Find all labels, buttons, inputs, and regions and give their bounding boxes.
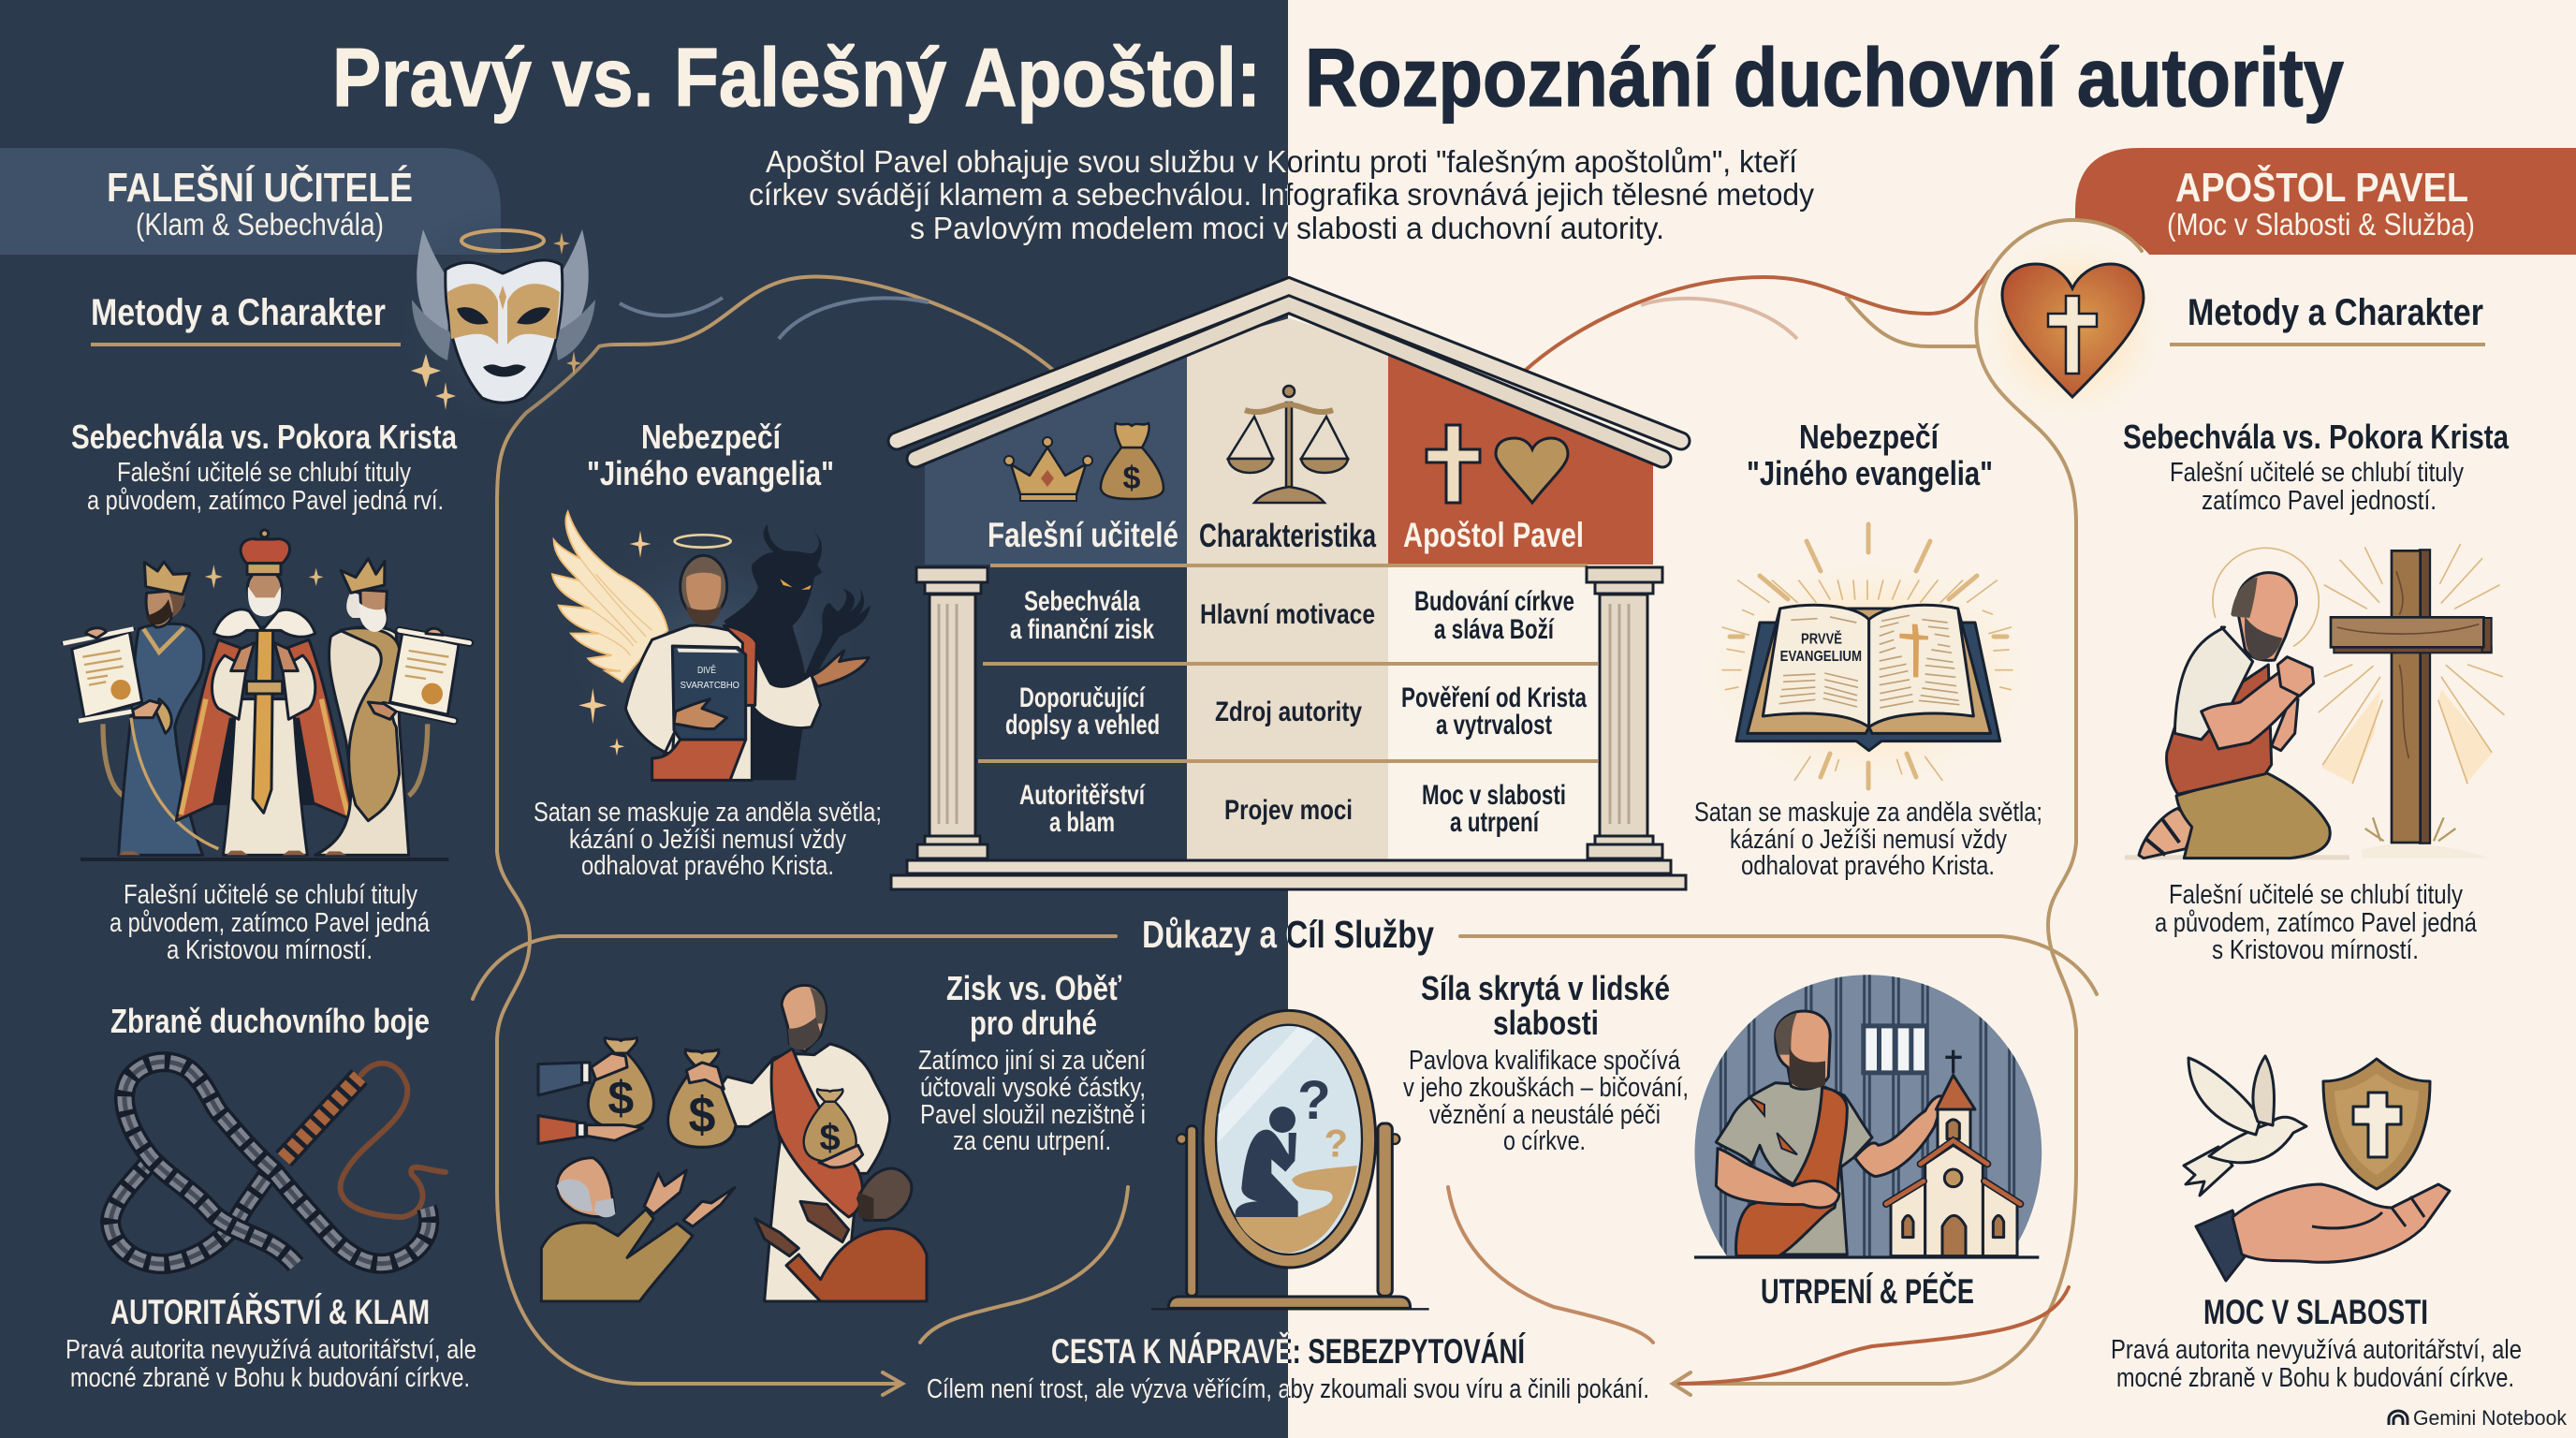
- table row: display of power: Moc v slabosti: [1422, 780, 1566, 811]
- caption: Paul humility: s Kristovou mírností.: [2212, 935, 2419, 965]
- text block: Síla skrytá v lidské slabosti: o církve.: [1503, 1126, 1586, 1156]
- temple: gable column false teachers: [925, 348, 1187, 565]
- icon: heart with cross: [1973, 228, 2172, 427]
- table row: source of authority: Doporučující: [1019, 682, 1146, 713]
- icon: golden heart: [1496, 438, 1568, 503]
- illustration: suffering Paul with church in prison: [1694, 964, 2042, 1257]
- table row: display of power: a blam: [1049, 807, 1115, 838]
- brand: Gemini Notebook: Gemini Notebook: [2413, 1406, 2568, 1430]
- caption: false teachers boast: a Kristovou mírností.: [167, 935, 373, 965]
- caption: Paul humility: a původem, zatímco Pavel jedná: [2155, 908, 2478, 938]
- text block: Satan masks right: kázání o Ježíši nemusí vždy: [1730, 825, 2007, 855]
- whip: [284, 1064, 446, 1217]
- illustration: angel of light masking a demon: SVARATCBHO: [681, 681, 739, 691]
- bag 1: [588, 1037, 653, 1128]
- text block: Sebechvála right: zatímco Pavel jedností.: [2202, 486, 2437, 516]
- table row: display of power: Autoritěřství: [1019, 780, 1146, 811]
- illustration: mirror of self-examination: ?: [1297, 1070, 1331, 1131]
- table header labels: Apoštol Pavel: [1403, 516, 1584, 554]
- temple: right column pillar: [1587, 567, 1662, 858]
- bag 2: [668, 1049, 736, 1147]
- table row: source of authority: [1005, 682, 1587, 741]
- chain links: [110, 1062, 429, 1265]
- panel header: false teachers: (Klam & Sebechvála): [136, 207, 384, 242]
- text block: Sebechvála left: [71, 418, 458, 516]
- icon: money bag: $: [1123, 461, 1141, 496]
- text block: Satan masks left: [534, 798, 882, 881]
- background: dark left half: [0, 0, 1288, 1438]
- caption: Paul humility: [2155, 880, 2478, 965]
- title: Rozpoznání duchovní autority: [1305, 31, 2344, 124]
- table row: source of authority: a vytrvalost: [1436, 710, 1552, 741]
- connector: left flowing lines: [473, 277, 1128, 1395]
- connector: right flowing lines: [1448, 220, 2175, 1395]
- caption: false teachers boast: Falešní učitelé se chlubí tituly: [124, 880, 417, 910]
- text block: Sebechvála right: [2123, 418, 2510, 516]
- text block: Zisk vs. Oběť: účtovali vysoké částky,: [920, 1073, 1146, 1103]
- heading: Zbraně duchovního boje: Zbraně duchovního boje: [110, 1002, 430, 1040]
- caption: Paul humility: Falešní učitelé se chlubí tituly: [2169, 880, 2463, 910]
- table row: main motivation: a finanční zisk: [1010, 614, 1154, 645]
- bag 3: $: [820, 1118, 841, 1159]
- text block: Moc v slabosti: MOC V SLABOSTI: [2203, 1293, 2428, 1331]
- intro text: Apoštol Pavel obhajuje svou službu v Korintu proti "falešným apoštolům", kteří: [766, 144, 1797, 179]
- illustration: chains and whip: [110, 1062, 446, 1265]
- table header labels: [988, 516, 1584, 554]
- bag 2: $: [689, 1087, 715, 1143]
- icon: open hand: [2196, 1184, 2450, 1281]
- table row: source of authority: Pověření od Krista: [1401, 682, 1587, 713]
- temple: table left column: [936, 565, 1187, 859]
- illustration: mirror of self-examination: [1151, 1010, 1429, 1309]
- icon: venetian mask with wings and halo: [386, 206, 620, 440]
- heading: Metody a Charakter right: Metody a Charakter: [2188, 292, 2483, 333]
- text block: Zisk vs. Oběť: Zatímco jiní si za učení: [918, 1046, 1146, 1076]
- text block: Nebezpečí left: Nebezpečí: [641, 418, 782, 456]
- table row: display of power: Projev moci: [1224, 795, 1353, 826]
- text block: Zisk vs. Oběť: Zisk vs. Oběť: [946, 969, 1122, 1007]
- panel header: apostle Paul: APOŠTOL PAVEL: [2175, 163, 2468, 211]
- temple: roof: [897, 286, 1681, 459]
- text block: Moc v slabosti: [2111, 1293, 2522, 1393]
- background: cream right half: [1288, 0, 2576, 1438]
- temple: table middle column: [1187, 565, 1388, 859]
- bag 1: $: [607, 1072, 634, 1124]
- text block: Zisk vs. Oběť: Pavel sloužil nezištně i: [920, 1100, 1146, 1130]
- text block: Autoritářství a klam: mocné zbraně v Bohu k budování církve.: [70, 1363, 470, 1393]
- icon: crown: [1004, 437, 1092, 501]
- illustration: radiant open bible: PRVVĚ: [1801, 629, 1842, 647]
- table row: display of power: a utrpení: [1450, 807, 1540, 838]
- label: UTRPENÍ & PÉČE: UTRPENÍ & PÉČE: [1761, 1271, 1974, 1311]
- table row: main motivation: a sláva Boží: [1434, 614, 1555, 645]
- text block: Sebechvála right: Falešní učitelé se chlubí tituly: [2170, 458, 2464, 488]
- text block: Nebezpečí left: [587, 418, 834, 492]
- icon: shield with cross: [2323, 1059, 2430, 1189]
- text block: Sebechvála left: Sebechvála vs. Pokora Krista: [71, 418, 458, 456]
- temple: row rules: [978, 565, 1598, 761]
- illustration: radiant open bible: EVANGELIUM: [1780, 649, 1862, 665]
- table row: source of authority: doplsy a vehled: [1005, 710, 1160, 741]
- temple: gable column characteristics: [1187, 318, 1388, 565]
- temple: table right column: [1388, 565, 1613, 859]
- illustration: angel of light masking a demon: [546, 508, 877, 784]
- illustration: dove, shield and open hand: [2184, 1056, 2450, 1281]
- panel header: false teachers: FALEŠNÍ UČITELÉ: [107, 163, 413, 211]
- text block: Síla skrytá v lidské slabosti: [1403, 969, 1689, 1156]
- table header labels: Charakteristika: [1199, 518, 1376, 554]
- temple: gable column apostle: [1388, 348, 1653, 565]
- table row: main motivation: Budování církve: [1414, 586, 1574, 617]
- text block: Nebezpečí right: [1747, 418, 1993, 492]
- icon: cross: [1427, 425, 1480, 503]
- panel header: apostle Paul: [2075, 148, 2576, 255]
- text block: Síla skrytá v lidské slabosti: Síla skrytá v lidské: [1421, 969, 1670, 1007]
- text block: path to remedy: [927, 1331, 1649, 1404]
- text block: Satan masks right: [1694, 798, 2042, 881]
- table row: source of authority: Zdroj autority: [1215, 697, 1362, 727]
- intro text: církev svádějí klamem a sebechválou. Infografika srovnává jejich tělesné metody: [749, 177, 1814, 212]
- text block: Síla skrytá v lidské slabosti: Pavlova kvalifikace spočívá: [1409, 1046, 1681, 1076]
- text block: Satan masks left: odhalovat pravého Krista.: [581, 851, 834, 881]
- icon: money bag: [1101, 423, 1164, 499]
- temple: left column pillar: [916, 567, 988, 858]
- text block: Zisk vs. Oběť: za cenu utrpení.: [953, 1126, 1111, 1156]
- icon: dove: [2184, 1056, 2306, 1196]
- caption: false teachers boast: a původem, zatímco Pavel jedná: [110, 908, 431, 938]
- bag 3: [804, 1089, 856, 1162]
- text block: Satan masks left: Satan se maskuje za anděla světla;: [534, 798, 882, 828]
- title: Pravý vs. Falešný Apoštol:: [332, 31, 1261, 124]
- text block: Síla skrytá v lidské slabosti: věznění a neustálé péči: [1429, 1100, 1661, 1130]
- intro text: [749, 144, 1814, 245]
- text block: Autoritářství a klam: AUTORITÁŘSTVÍ & KLAM: [110, 1292, 430, 1331]
- table row: main motivation: Hlavní motivace: [1200, 599, 1375, 630]
- text block: Nebezpečí left: "Jiného evangelia": [587, 454, 834, 492]
- heading: Metody a Charakter left: Metody a Charakter: [91, 292, 386, 333]
- text block: Sebechvála left: a původem, zatímco Pavel jedná rví.: [87, 486, 444, 516]
- text block: Satan masks right: Satan se maskuje za anděla světla;: [1694, 798, 2042, 828]
- text block: Autoritářství a klam: [66, 1292, 476, 1393]
- illustration: angel of light masking a demon: DIVĚ: [697, 664, 716, 676]
- text block: Nebezpečí right: Nebezpečí: [1799, 418, 1939, 456]
- text block: path to remedy: CESTA K NÁPRAVĚ: SEBEZPYTOVÁNÍ: [1051, 1331, 1526, 1371]
- table row: display of power: [1019, 780, 1566, 838]
- caption: false teachers boast: [110, 880, 431, 965]
- icon: scales: [1228, 386, 1348, 503]
- text block: Síla skrytá v lidské slabosti: v jeho zkouškách – bičování,: [1403, 1073, 1689, 1103]
- table header labels: Falešní učitelé: [988, 516, 1178, 554]
- illustration: money bags and giving: [538, 985, 927, 1301]
- text block: Sebechvála left: Falešní učitelé se chlubí tituly: [117, 458, 411, 488]
- text block: path to remedy: Cílem není trost, ale výzva věřícím, aby zkoumali svou víru a činili pokání.: [927, 1374, 1649, 1404]
- temple comparison table: [891, 286, 1686, 889]
- text block: Autoritářství a klam: Pravá autorita nevyužívá autoritářství, ale: [66, 1335, 476, 1365]
- title: [332, 31, 2344, 124]
- table row: main motivation: Sebechvála: [1024, 586, 1140, 617]
- heading: Důkazy a Cíl Služby: Důkazy a Cíl Služby: [1142, 913, 1434, 956]
- table row: main motivation: [1010, 586, 1574, 645]
- text block: Zisk vs. Oběť: pro druhé: [970, 1004, 1097, 1042]
- temple: steps: [891, 860, 1686, 889]
- text block: Nebezpečí right: "Jiného evangelia": [1747, 454, 1993, 492]
- text block: Zisk vs. Oběť: [918, 969, 1146, 1156]
- panel header: apostle Paul: (Moc v Slabosti & Služba): [2167, 207, 2475, 242]
- illustration: radiant open bible: [1695, 524, 2042, 796]
- illustration: mirror of self-examination: ?: [1325, 1122, 1348, 1166]
- illustration: Paul kneeling before the cross: [2125, 545, 2504, 859]
- text block: Satan masks right: odhalovat pravého Krista.: [1741, 851, 1995, 881]
- intro text: s Pavlovým modelem moci v slabosti a duchovní autority.: [910, 211, 1664, 245]
- panel header: false teachers: [0, 148, 501, 255]
- text block: Satan masks left: kázání o Ježíši nemusí vždy: [569, 825, 846, 855]
- text block: Síla skrytá v lidské slabosti: slabosti: [1493, 1004, 1599, 1042]
- illustration: three false teachers as kings: [63, 530, 470, 861]
